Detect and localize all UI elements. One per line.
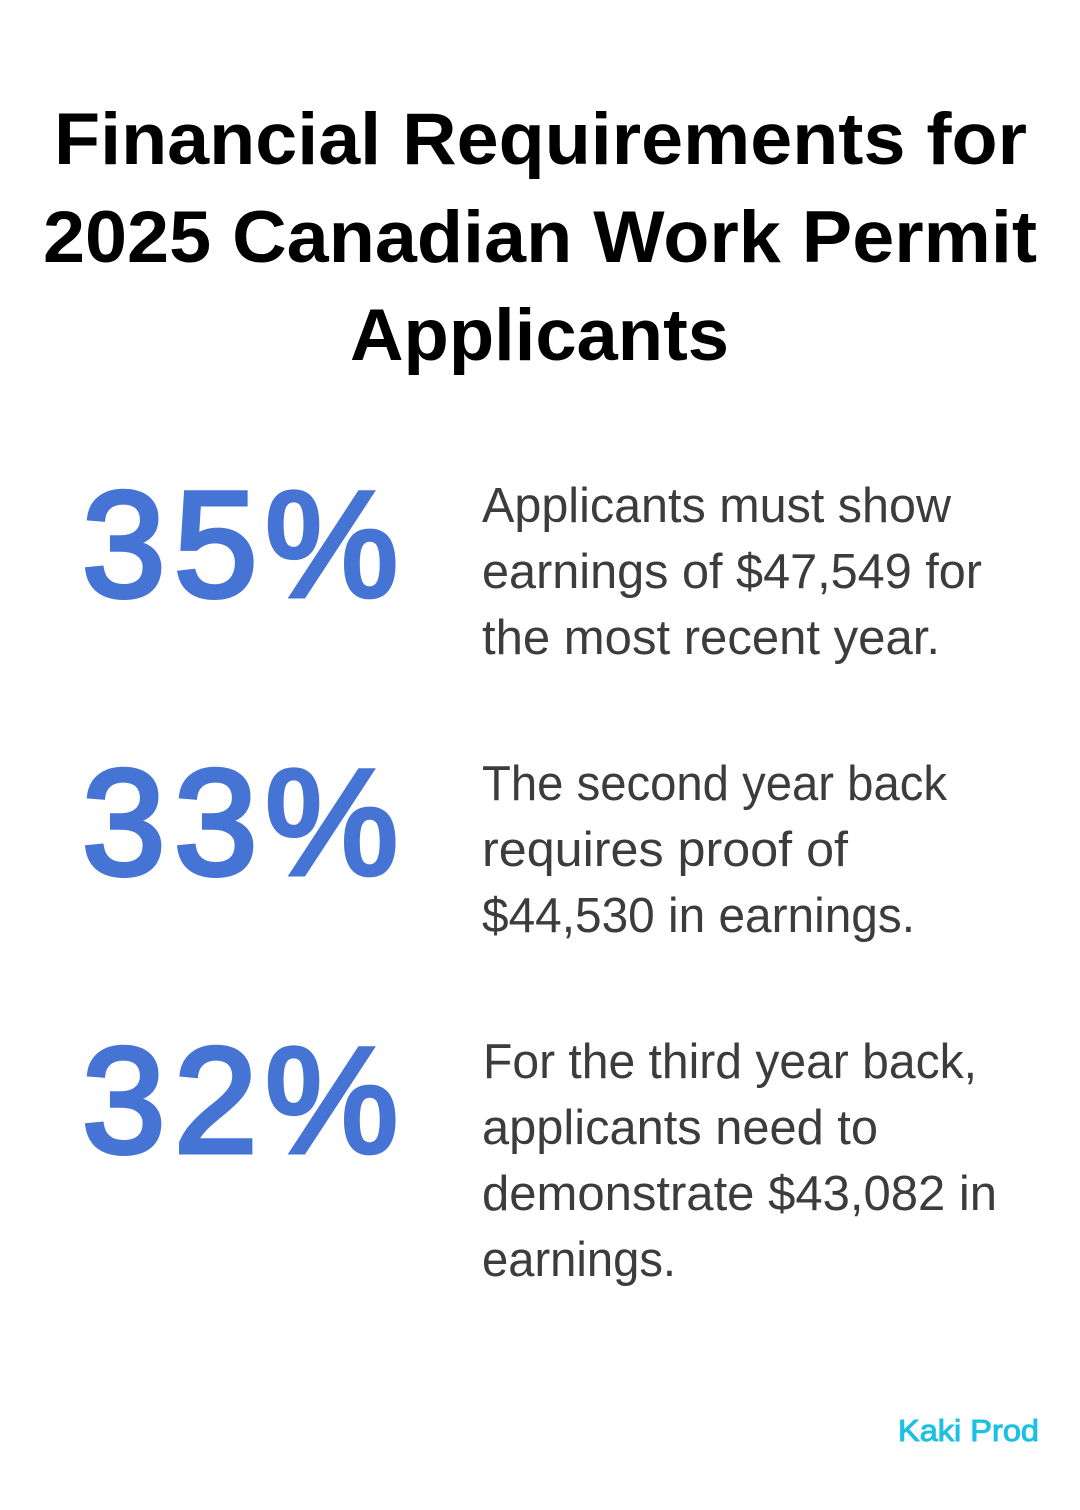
stat number: 33%: 3 (174, 738, 257, 906)
stat number: 35%: 3 (82, 460, 165, 628)
stat description: third year back: demonstrate $43,082 in (482, 1167, 997, 1221)
title: Applicants (350, 295, 729, 376)
stat number: 35%: % (265, 460, 398, 628)
title (43, 99, 1037, 376)
stat description: third year back: earnings. (482, 1233, 676, 1287)
stat description: second year back: requires proof of (482, 823, 848, 877)
logo: Kaki Prod: Kaki Prod (898, 1413, 1039, 1448)
stat number: 32%: 2 (174, 1016, 257, 1184)
stat description: third year back: For the third year back, (483, 1035, 977, 1089)
stat number: 35%: 5 (174, 460, 257, 628)
stat number: 32%: 3 (82, 1016, 165, 1184)
stat description: second year back: $44,530 in earnings. (482, 889, 915, 943)
stat number: 33%: 3 (82, 738, 165, 906)
stat description: most recent year: earnings of $47,549 for (482, 545, 982, 599)
stat description: most recent year (482, 479, 982, 665)
title: Financial Requirements for (54, 99, 1027, 180)
stat description: third year back: applicants need to (482, 1101, 878, 1155)
stat description: most recent year: Applicants must show (482, 479, 952, 533)
stat description: third year back (482, 1035, 997, 1287)
panel: 32% statistic (82, 1016, 997, 1287)
stat number: 33%: % (265, 738, 398, 906)
panel: 35% statistic (82, 460, 982, 665)
stat description: second year back: The second year back (482, 757, 947, 811)
stat description: most recent year: the most recent year. (482, 611, 940, 665)
panel: 33% statistic (82, 738, 947, 943)
stat number: 32%: % (265, 1016, 398, 1184)
stat description: second year back (482, 757, 947, 943)
title: 2025 Canadian Work Permit (43, 197, 1037, 278)
